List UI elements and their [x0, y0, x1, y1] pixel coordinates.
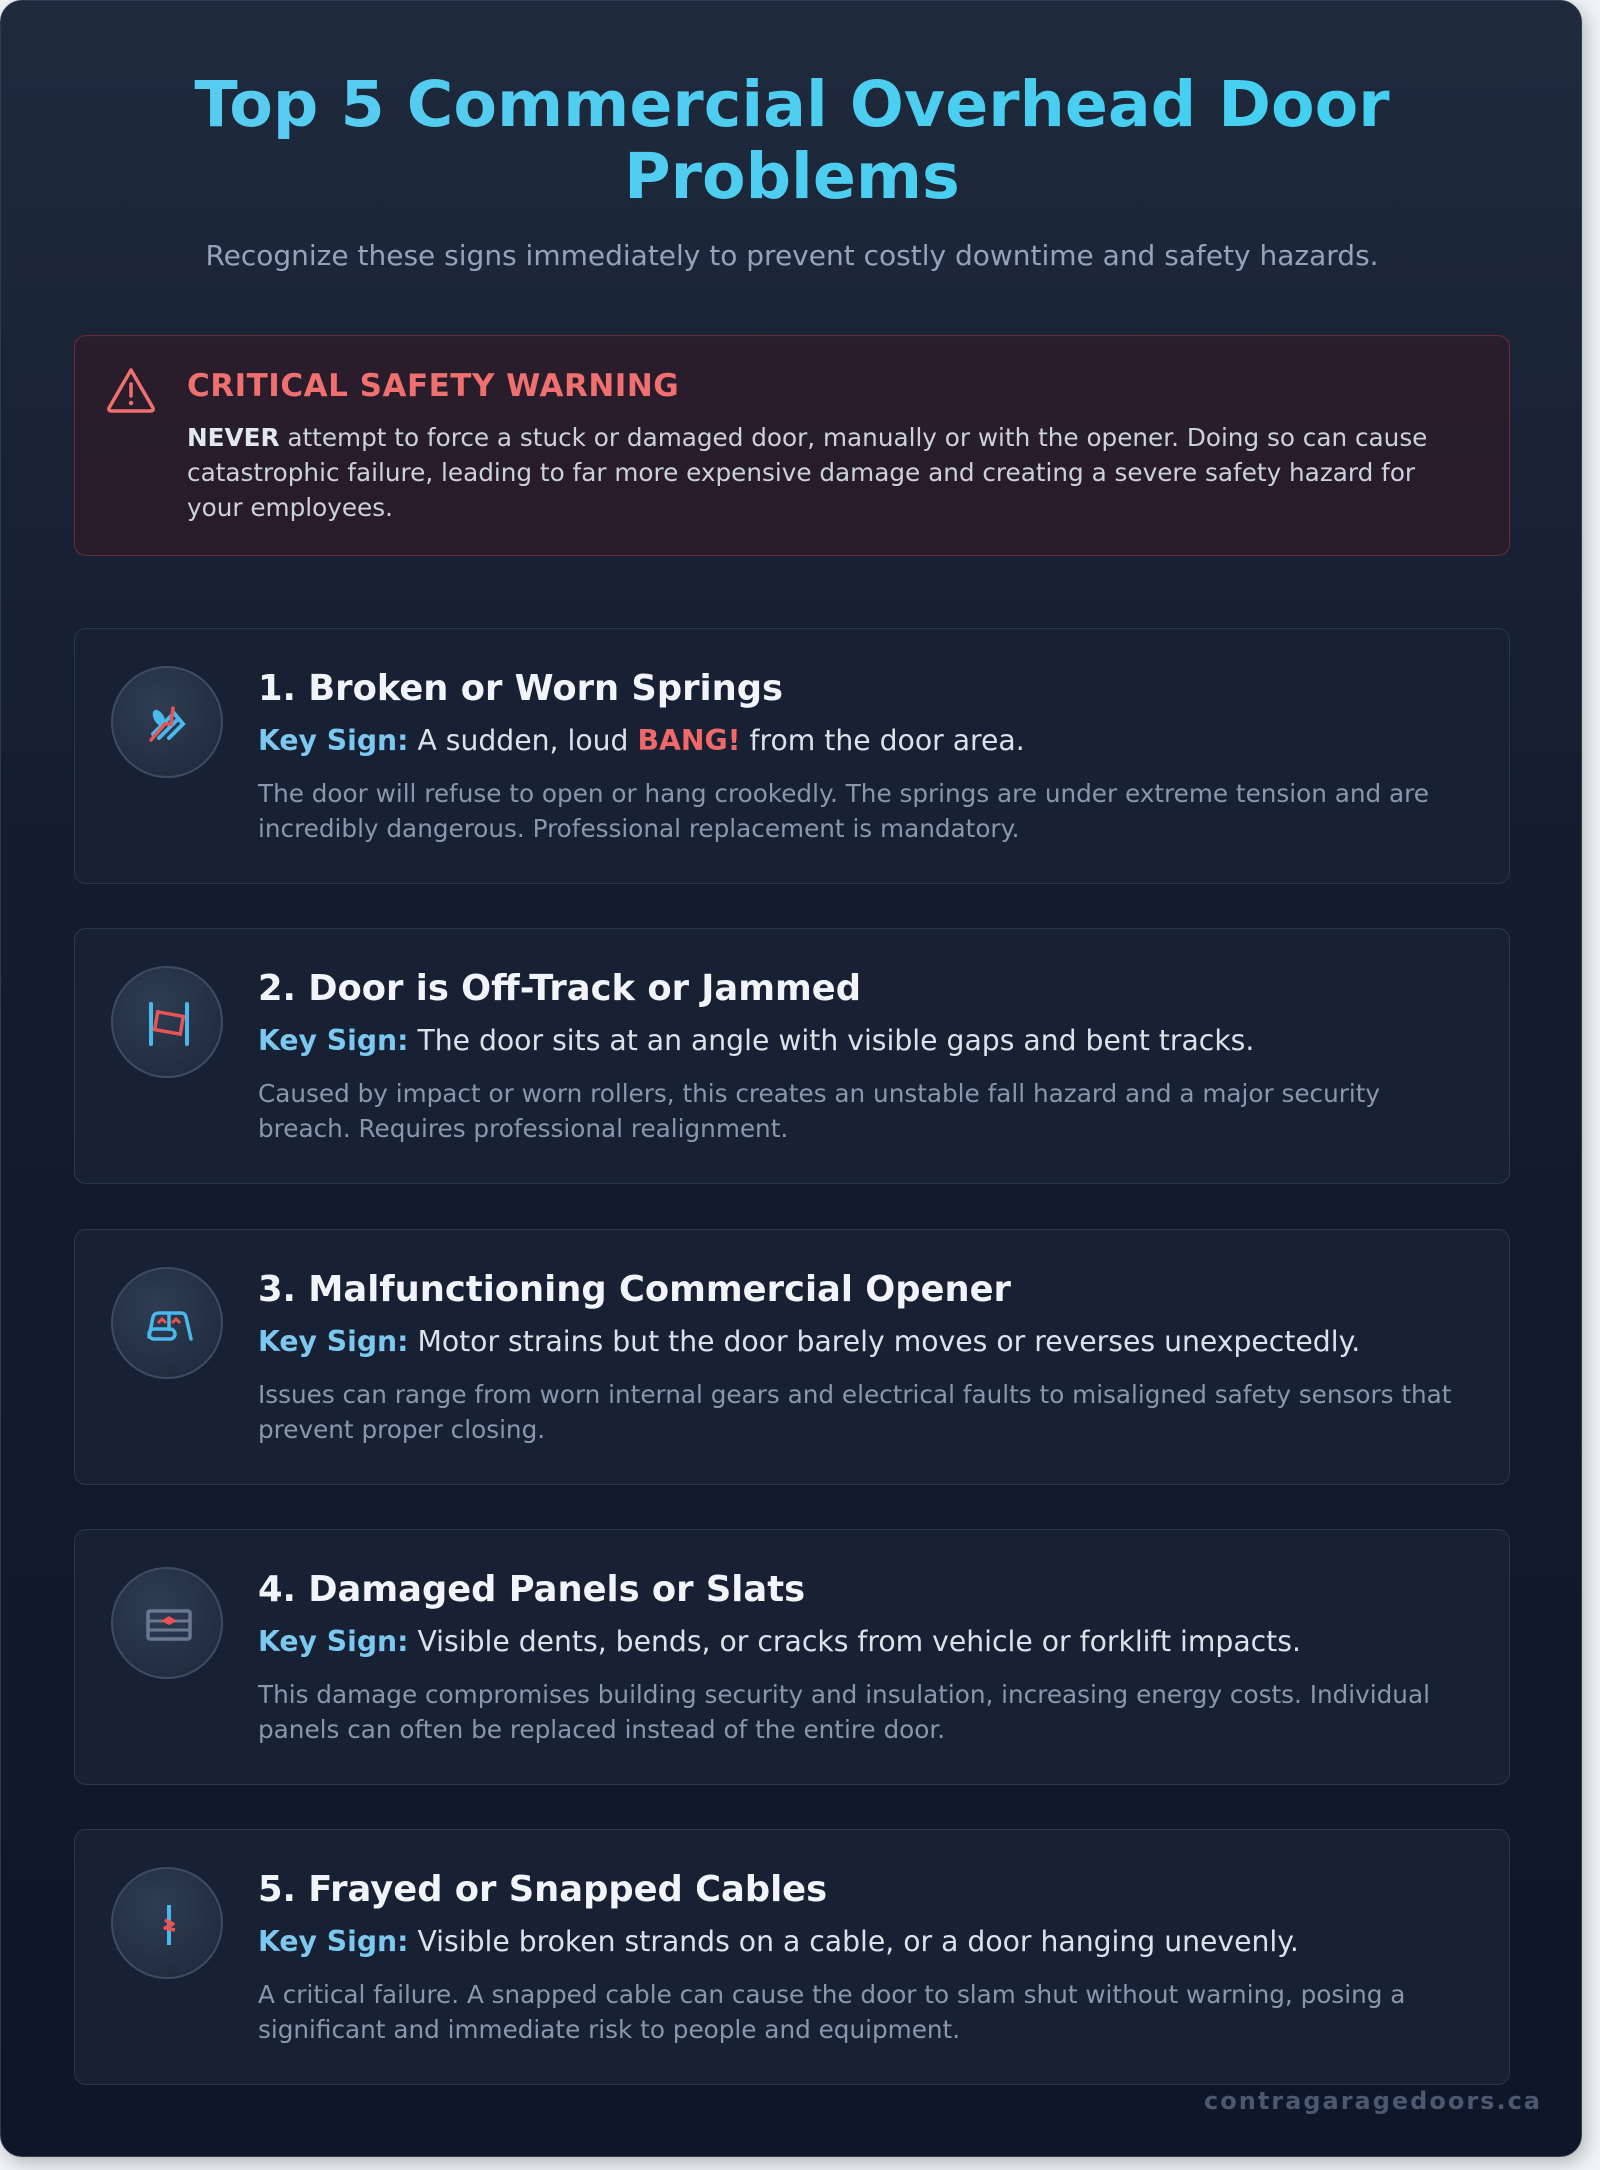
- icon: damaged panels: [111, 1567, 223, 1679]
- panel: problem 2: [74, 928, 1510, 1184]
- panel: problem 4: Key Sign: Visible dents, bends, or cracks from vehicle or forklift impacts.: [258, 1625, 1301, 1658]
- panel: problem 1: Key Sign: A sudden, loud BANG! from the door area.: [258, 724, 1025, 757]
- title: Top 5 Commercial Overhead Door: [194, 67, 1390, 141]
- panel: safety warning: [74, 335, 1510, 556]
- panel: problem 4: 4. Damaged Panels or Slats: [258, 1569, 805, 1610]
- panel: problem 5: A critical failure. A snapped cable can cause the door to slam shut without warning, posing a significant and immediate risk to people and equipment.: [258, 1980, 1405, 2044]
- panel: problem 3: [74, 1229, 1510, 1485]
- panel: problem 1: The door will refuse to open or hang crookedly. The springs are under extreme tension and are incredibly dangerous. Professional replacement is mandatory.: [258, 779, 1429, 843]
- title: Problems: [624, 139, 960, 213]
- panel: problem 1: 1. Broken or Worn Springs: [258, 668, 783, 709]
- panel: problem 3: 3. Malfunctioning Commercial Opener: [258, 1269, 1011, 1310]
- panel: problem 2: 2. Door is Off-Track or Jammed: [258, 968, 861, 1009]
- panel: problem 4: [74, 1529, 1510, 1785]
- warning heading: CRITICAL SAFETY WARNING: [187, 368, 679, 404]
- panel: problem 5: 5. Frayed or Snapped Cables: [258, 1869, 827, 1910]
- title: [1, 68, 1583, 212]
- panel: problem 5: [74, 1829, 1510, 2085]
- panel: problem 5: Key Sign: Visible broken strands on a cable, or a door hanging unevenly.: [258, 1925, 1299, 1958]
- warning text: NEVER attempt to force a stuck or damaged door, manually or with the opener. Doing so can cause catastrophic failure, leading to far more expensive damage and creating a severe safety hazard for your employees.: [187, 423, 1427, 522]
- icon: opener: [111, 1267, 223, 1379]
- icon: broken spring: [111, 666, 223, 778]
- panel: problem 4: This damage compromises building security and insulation, increasing energy costs. Individual panels can often be replaced instead of the entire door.: [258, 1680, 1430, 1744]
- subtitle: Recognize these signs immediately to prevent costly downtime and safety hazards.: [205, 239, 1379, 272]
- panel: problem 1: [74, 628, 1510, 884]
- icon: warning triangle: [107, 368, 155, 413]
- panel: problem 3: Issues can range from worn internal gears and electrical faults to misaligned safety sensors that prevent proper closing.: [258, 1380, 1451, 1444]
- panel: problem 2: Key Sign: The door sits at an angle with visible gaps and bent tracks.: [258, 1024, 1254, 1057]
- icon: off-track door: [111, 966, 223, 1078]
- panel: problem 3: Key Sign: Motor strains but the door barely moves or reverses unexpectedly.: [258, 1325, 1360, 1358]
- footer: website: contragaragedoors.ca: [1204, 2087, 1542, 2115]
- icon: snapped cable: [111, 1867, 223, 1979]
- panel: problem 2: Caused by impact or worn rollers, this creates an unstable fall hazard and a major security breach. Requires professional realignment.: [258, 1079, 1380, 1143]
